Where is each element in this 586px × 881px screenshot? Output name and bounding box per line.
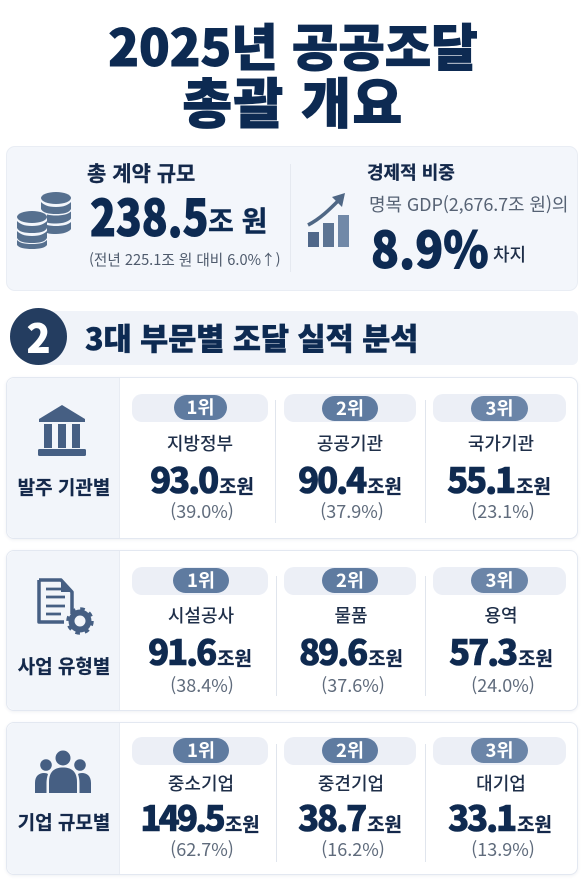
panel side: by size <box>7 723 120 874</box>
share: (37.6%) <box>321 672 385 698</box>
unit: trillion won: 조 원 <box>208 200 267 240</box>
label: by agency: 발주 기관별 <box>18 473 110 500</box>
label: by type: 사업 유형별 <box>18 652 110 679</box>
share: (38.4%) <box>170 672 234 698</box>
icon: people <box>35 750 91 793</box>
icon: document with gear <box>37 578 94 635</box>
section heading: 3대 부문별 조달 실적 분석 <box>85 315 418 359</box>
rank 3 <box>471 738 528 763</box>
name: large: 대기업 <box>476 770 526 796</box>
rank 3: 3위 <box>486 737 513 763</box>
heading: total contract: 총 계약 규모 <box>87 158 195 188</box>
share: (39.0%) <box>170 498 234 524</box>
name: goods: 물품 <box>334 602 368 628</box>
rank 2 <box>322 396 378 421</box>
name: central government: 국가기관 <box>468 430 534 456</box>
rank 3 <box>471 396 528 421</box>
icon: growth chart <box>307 193 349 247</box>
rank 2: 2위 <box>336 395 364 421</box>
section number badge <box>10 308 67 365</box>
section heading bar <box>35 311 578 365</box>
rank 3: 3위 <box>486 567 513 593</box>
rank 3 <box>471 568 528 593</box>
text: share suffix: 차지 <box>493 241 526 267</box>
name: mid-sized: 중견기업 <box>318 770 384 796</box>
note: year on year: (전년 225.1조 원 대비 6.0%↑) <box>89 249 281 270</box>
value: 89.6조원 <box>299 625 403 676</box>
share: (23.1%) <box>471 498 535 524</box>
share: (13.9%) <box>471 836 535 862</box>
rank 3: 3위 <box>486 395 513 421</box>
rank 1: 1위 <box>187 394 214 420</box>
name: services: 용역 <box>484 602 518 628</box>
rank 1: 1위 <box>187 567 215 593</box>
name: construction: 시설공사 <box>168 602 234 628</box>
value: 90.4조원 <box>298 453 402 504</box>
text: nominal GDP: 명목 GDP(2,676.7조 원)의 <box>369 191 568 217</box>
label: by size: 기업 규모별 <box>18 808 110 835</box>
rank 1 <box>173 738 229 763</box>
panel side: by agency <box>7 378 120 538</box>
rank 1: 1위 <box>187 737 215 763</box>
value: 149.5조원 <box>140 791 260 842</box>
icon: coin stacks <box>17 192 71 249</box>
share: (16.2%) <box>321 836 385 862</box>
panel: by agency <box>6 377 578 539</box>
title: 총괄 개요 <box>182 60 404 139</box>
section number badge: 2 <box>26 307 51 365</box>
value: 55.1조원 <box>447 453 551 504</box>
rank 2 <box>322 738 378 763</box>
share: (24.0%) <box>471 672 535 698</box>
value: 91.6조원 <box>148 625 252 676</box>
value: 93.0조원 <box>150 453 254 504</box>
rank 2: 2위 <box>336 737 364 763</box>
rank 1 <box>174 395 227 420</box>
value: 33.1조원 <box>448 791 552 842</box>
name: public institutions: 공공기관 <box>317 430 383 456</box>
panel: by size <box>6 722 578 875</box>
name: SMEs: 중소기업 <box>168 770 234 796</box>
name: local government: 지방정부 <box>167 430 233 456</box>
panel: by type <box>6 550 578 711</box>
big number: total contract: 238.5 <box>90 179 209 251</box>
value: 57.3조원 <box>449 625 553 676</box>
share: (62.7%) <box>170 836 234 862</box>
rank 2: 2위 <box>336 567 364 593</box>
title <box>108 7 478 139</box>
big number: share: 8.9% <box>371 211 489 283</box>
heading: economic share: 경제적 비중 <box>367 159 455 185</box>
panel: summary <box>6 146 578 291</box>
icon: institution <box>38 405 86 456</box>
share: (37.9%) <box>320 498 384 524</box>
value: 38.7조원 <box>298 791 402 842</box>
rank 2 <box>322 568 378 593</box>
panel side: by type <box>7 551 120 710</box>
rank 1 <box>173 568 229 593</box>
title: 2025년 공공조달 <box>108 7 478 81</box>
